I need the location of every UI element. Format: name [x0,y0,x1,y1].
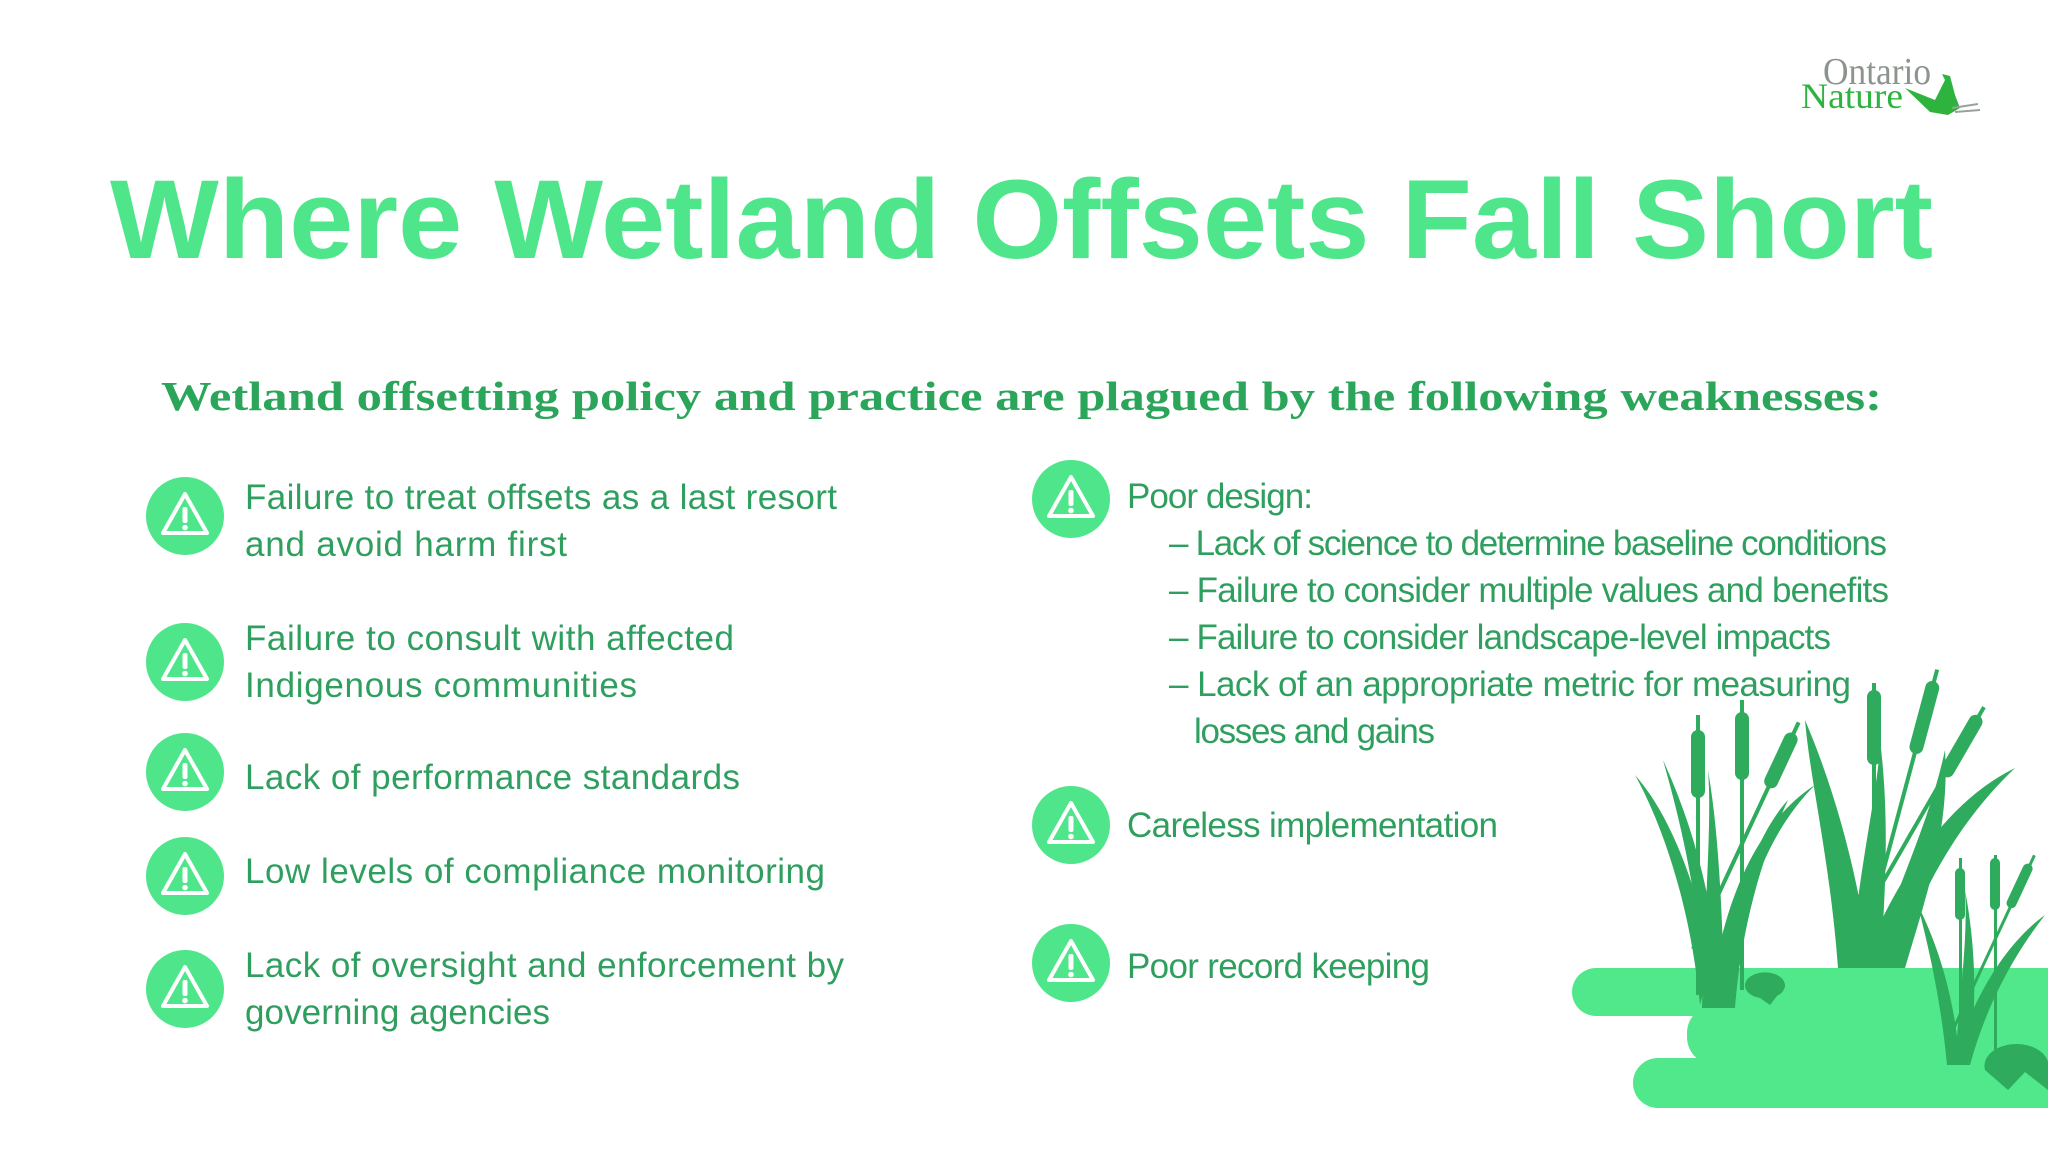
item 1 [146,477,837,564]
item 1: Failure to treat offsets as a last resort [245,478,837,517]
illustration: wetland cattails [1572,668,2048,1108]
logo: Ontario Nature: Nature [1801,76,1903,116]
item 2: Failure to consult with affected [245,619,734,658]
item: poor design: – Lack of an appropriate metric for measuring [1169,665,1851,704]
item: careless implementation [1032,786,1498,864]
item 2 [146,619,734,705]
item: poor design: – Lack of science to determine baseline conditions [1169,524,1887,563]
item 2: Indigenous communities [245,666,637,705]
item 1: and avoid harm first [245,525,567,564]
item 5 [146,946,844,1032]
item: poor design: – Failure to consider multiple values and benefits [1169,571,1889,610]
item: poor record keeping [1032,924,1430,1002]
panel: left list [146,477,844,1032]
item: careless implementation: Careless implementation [1127,806,1498,845]
subtitle: Wetland offsetting policy and practice are plagued by the following weaknesses: [161,373,1882,419]
water [1572,968,2048,1108]
item: poor record keeping: Poor record keeping [1127,947,1430,986]
item: poor design: – Failure to consider landscape-level impacts [1169,618,1831,657]
title: Where Wetland Offsets Fall Short [110,157,1933,282]
item 4: Low levels of compliance monitoring [245,852,825,891]
item: poor design: losses and gains [1194,712,1435,751]
logo: Ontario Nature [1801,51,1980,116]
item 5: governing agencies [245,993,550,1032]
clump A [1635,700,1815,1008]
item: poor design: Poor design: [1127,477,1313,516]
clump C [1918,853,2045,1065]
item 5: Lack of oversight and enforcement by [245,946,844,985]
item 3: Lack of performance standards [245,758,740,797]
logo: Ontario Nature: Ontario [1823,51,1931,93]
lily pads [1745,972,1785,1005]
panel: right list [1032,460,1889,1002]
item 4 [146,837,825,915]
item: poor design [1032,460,1889,751]
item 3 [146,733,740,811]
clump B [1805,668,2015,968]
